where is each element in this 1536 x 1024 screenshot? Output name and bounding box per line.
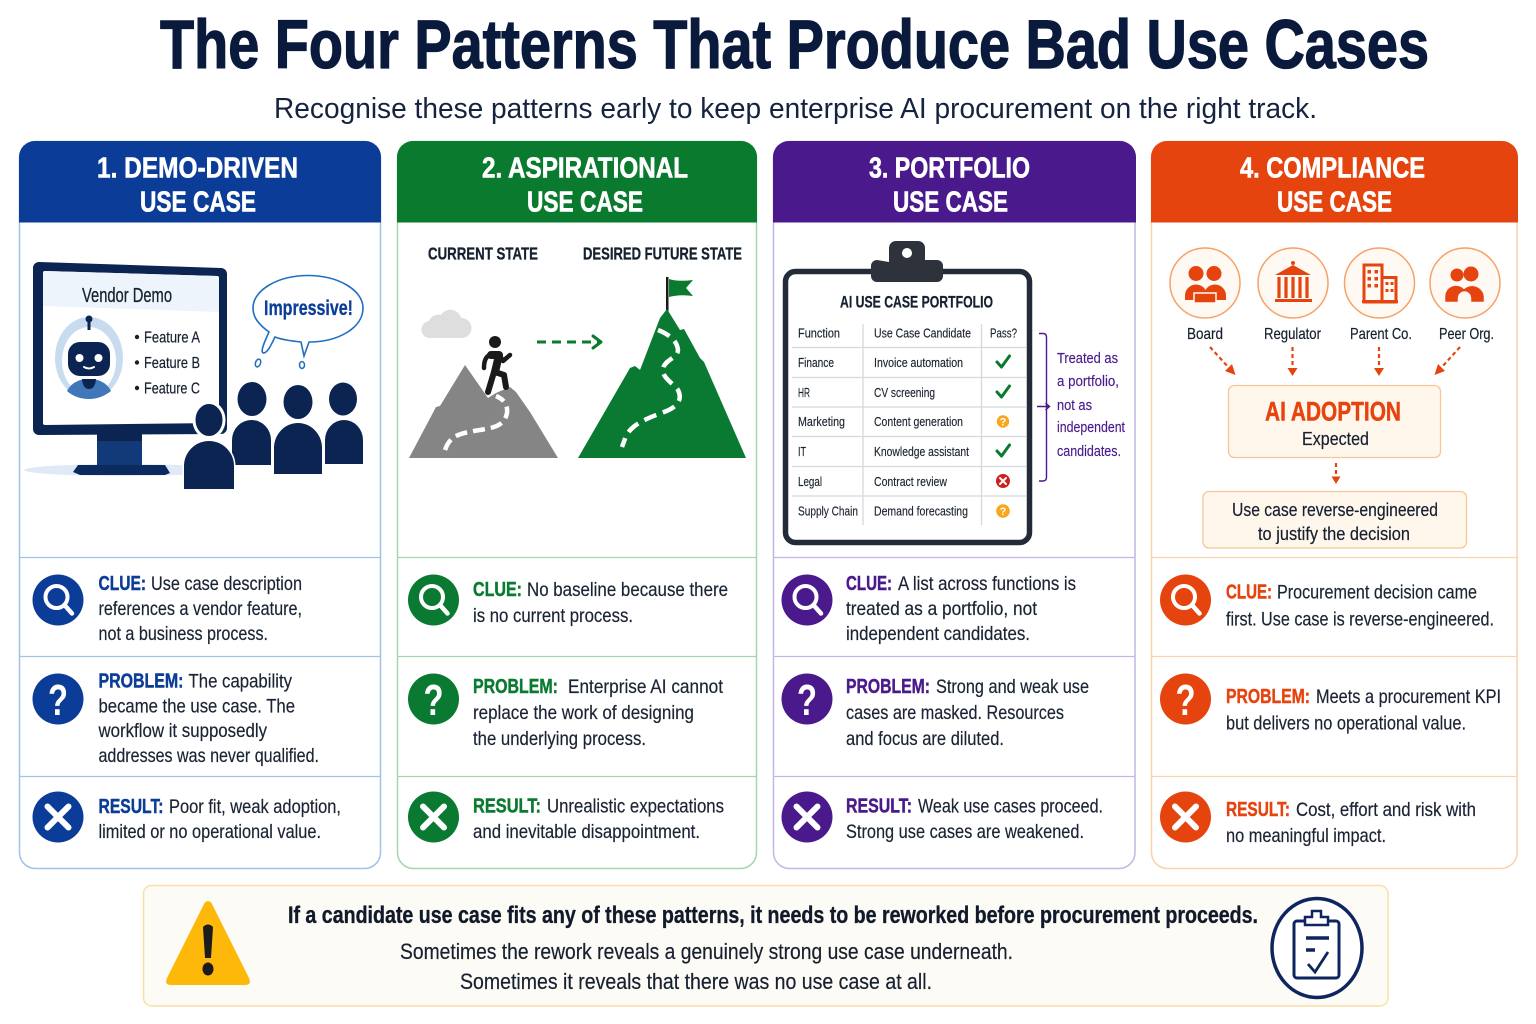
callout: impressive speech bubble: Impressive! <box>264 297 353 320</box>
icon: result cross <box>408 792 459 842</box>
callout: treated as a portfolio: a portfolio, <box>1057 373 1119 390</box>
text: problem: Strong and weak use <box>936 676 1089 698</box>
audience silhouettes <box>184 382 363 489</box>
icon: result cross <box>32 792 84 842</box>
icon: problem question mark: ? <box>797 676 817 725</box>
panel header: aspirational <box>397 141 757 222</box>
icon: peer organisation <box>1430 248 1500 318</box>
illustration: clipboard portfolio table: Supply Chain <box>798 504 858 518</box>
subtitle: Recognise these patterns early to keep enterprise AI procurement on the right track. <box>274 93 1317 125</box>
text: clue: CLUE: <box>98 573 146 595</box>
icon: walking person <box>484 336 510 392</box>
illustration: clipboard portfolio table: Finance <box>798 356 834 370</box>
panel: compliance use case <box>1151 141 1518 868</box>
text: result: limited or no operational value. <box>98 821 321 843</box>
text: problem: PROBLEM: <box>98 670 184 692</box>
callout: treated as a portfolio: Treated as <box>1057 350 1118 367</box>
panel header: compliance: 4. COMPLIANCE <box>1240 152 1425 184</box>
text: problem: PROBLEM: <box>1226 686 1310 708</box>
illustration: vendor demo monitor and audience: Feature C <box>144 380 200 398</box>
text: clue: is no current process. <box>473 605 633 627</box>
callout: impressive speech bubble <box>253 276 363 368</box>
stakeholder labels: Parent Co. <box>1350 326 1412 343</box>
text: supporting lines <box>400 939 1013 994</box>
text: problem <box>1226 686 1501 734</box>
text: main warning: If a candidate use case fits any of these patterns, it needs to be reworked before procurement proceeds. <box>288 902 1258 929</box>
text: result: Strong use cases are weakened. <box>846 821 1084 843</box>
icon: problem question mark: ? <box>424 676 444 725</box>
text: problem <box>846 676 1089 750</box>
icon: problem question mark <box>1160 674 1211 725</box>
stakeholder labels: Board <box>1187 326 1223 343</box>
panel: aspirational use case <box>397 141 757 868</box>
text: result: RESULT: <box>846 796 912 818</box>
text: clue <box>846 573 1076 645</box>
text: problem <box>473 676 724 750</box>
arrow: dashed current to future <box>537 336 601 348</box>
text: problem: workflow it supposedly <box>98 720 267 742</box>
icon: result cross <box>782 792 832 842</box>
illustration: clipboard portfolio table: Use Case Candidate <box>874 326 971 340</box>
text: result <box>473 796 724 843</box>
text: result: Unrealistic expectations <box>547 796 724 818</box>
icon: checklist clipboard <box>1272 898 1362 998</box>
text: clue: not a business process. <box>98 623 268 645</box>
text: clue: No baseline because there <box>527 579 728 601</box>
AI adoption box <box>1228 386 1440 458</box>
text: problem: but delivers no operational value. <box>1226 712 1466 734</box>
text: clue <box>473 579 728 627</box>
illustration: desired future state <box>578 244 746 458</box>
panel header: aspirational: 2. ASPIRATIONAL <box>482 152 688 184</box>
illustration: clipboard portfolio table: Marketing <box>798 415 845 429</box>
illustration: clipboard portfolio table: HR <box>798 386 810 400</box>
panel: portfolio use case <box>773 141 1136 868</box>
text: clue: A list across functions is <box>898 573 1076 595</box>
illustration: vendor demo monitor and audience <box>24 262 363 489</box>
stakeholder labels <box>1187 326 1494 343</box>
illustration: clipboard portfolio table: Contract review <box>874 475 948 489</box>
arrow: adoption to reverse-engineered <box>1332 463 1340 484</box>
text: clue: Procurement decision came <box>1277 582 1477 604</box>
callout: rework before procurement <box>144 886 1388 1006</box>
illustration: clipboard portfolio table: Demand forecasting <box>874 504 968 518</box>
stakeholder labels: Peer Org. <box>1439 326 1494 343</box>
text: result: Weak use cases proceed. <box>918 796 1103 818</box>
illustration: current state <box>409 244 601 458</box>
text: result <box>846 796 1103 843</box>
illustration: clipboard portfolio table: Invoice automation <box>874 356 963 370</box>
illustration: desired future state: DESIRED FUTURE STATE <box>583 244 742 264</box>
panel header: compliance: USE CASE <box>1277 186 1392 218</box>
text: clue: CLUE: <box>473 579 522 601</box>
icon: problem question mark: ? <box>48 676 68 725</box>
stakeholder labels: Regulator <box>1264 326 1322 343</box>
icon: problem question mark: ? <box>1176 676 1196 725</box>
arrows: stakeholders to AI adoption <box>1210 347 1460 376</box>
illustration: clipboard portfolio table: IT <box>798 445 806 459</box>
illustration: vendor demo monitor and audience: Feature A <box>144 330 200 346</box>
icon: clue magnifier <box>32 574 84 626</box>
text: result: RESULT: <box>98 796 164 818</box>
panel header: compliance <box>1151 141 1518 222</box>
text: clue: CLUE: <box>846 573 892 595</box>
text: problem: PROBLEM: <box>846 676 930 698</box>
text: clue <box>1226 582 1494 630</box>
panel: demo-driven use case <box>19 141 381 868</box>
text: result: and inevitable disappointment. <box>473 821 700 843</box>
text: clue: Use case description <box>151 573 302 595</box>
icon: problem question mark <box>32 674 84 725</box>
callout: treated as a portfolio: candidates. <box>1057 443 1121 460</box>
illustration: clipboard portfolio table: Content generation <box>874 415 963 429</box>
AI adoption box: Expected <box>1302 428 1369 449</box>
text: problem <box>98 670 319 767</box>
text: supporting lines: Sometimes the rework reveals a genuinely strong use case underneath. <box>400 939 1013 964</box>
icon: clue magnifier <box>782 574 832 626</box>
text: problem: Meets a procurement KPI <box>1316 686 1501 708</box>
text: clue <box>98 573 302 645</box>
icon: warning triangle <box>166 901 250 985</box>
panel header: portfolio: USE CASE <box>893 186 1008 218</box>
callout: treated as a portfolio: not as <box>1057 397 1092 414</box>
illustration: current state: CURRENT STATE <box>428 244 538 264</box>
text: problem: PROBLEM: <box>473 676 558 698</box>
panel header: aspirational: USE CASE <box>527 186 643 218</box>
illustration: clipboard portfolio table: Pass? <box>990 326 1017 340</box>
text: result: Cost, effort and risk with <box>1296 799 1476 821</box>
panel header: demo-driven: USE CASE <box>140 186 256 218</box>
pass status icons: ? <box>1000 416 1007 428</box>
icon: cloud <box>421 310 472 338</box>
text: problem: addresses was never qualified. <box>98 745 319 767</box>
icon: clue magnifier <box>1160 574 1211 626</box>
illustration: vendor demo monitor and audience: Vendor Demo <box>82 285 172 307</box>
illustration: clipboard portfolio table: Knowledge assistant <box>874 445 969 459</box>
icon: clue magnifier <box>408 574 459 626</box>
panel header: portfolio <box>773 141 1136 222</box>
text: problem: cases are masked. Resources <box>846 702 1064 724</box>
text: clue: treated as a portfolio, not <box>846 598 1038 620</box>
text: clue: CLUE: <box>1226 582 1272 604</box>
text: problem: The capability <box>188 670 292 692</box>
text: problem: Enterprise AI cannot <box>568 676 724 698</box>
panel header: demo-driven <box>19 141 381 222</box>
text: result: RESULT: <box>473 796 541 818</box>
icon: problem question mark <box>408 674 459 725</box>
pass status icons: ? <box>1000 506 1007 518</box>
text: clue: independent candidates. <box>846 623 1030 645</box>
text: problem: became the use case. The <box>98 696 295 718</box>
illustration: clipboard portfolio table <box>786 241 1030 542</box>
illustration: clipboard portfolio table: AI USE CASE PORTFOLIO <box>840 294 993 312</box>
text: problem: replace the work of designing <box>473 702 694 724</box>
text: result <box>1226 799 1476 847</box>
illustration: clipboard portfolio table: CV screening <box>874 386 935 400</box>
text: supporting lines: Sometimes it reveals that there was no use case at all. <box>460 969 932 994</box>
icon: problem question mark <box>782 674 832 725</box>
callout: treated as a portfolio <box>1037 334 1126 481</box>
illustration: clipboard portfolio table: Legal <box>798 475 822 489</box>
icon: result cross <box>1160 792 1211 842</box>
reverse-engineered box: Use case reverse-engineered <box>1232 499 1438 520</box>
text: problem: the underlying process. <box>473 728 646 750</box>
illustration: vendor demo monitor and audience: Feature B <box>144 355 200 372</box>
illustration: clipboard portfolio table: Function <box>798 326 840 340</box>
pass status icons <box>996 356 1010 518</box>
text: result: Poor fit, weak adoption, <box>169 796 341 818</box>
text: problem: and focus are diluted. <box>846 728 1004 750</box>
panel header: portfolio: 3. PORTFOLIO <box>869 152 1030 184</box>
reverse-engineered box <box>1203 492 1466 548</box>
text: result: RESULT: <box>1226 799 1290 821</box>
icon: parent company <box>1344 248 1414 318</box>
AI adoption box: AI ADOPTION <box>1265 396 1401 426</box>
reverse-engineered box: to justify the decision <box>1258 523 1410 544</box>
icon: regulator <box>1258 248 1328 318</box>
text: result: no meaningful impact. <box>1226 825 1386 847</box>
text: result <box>98 796 341 843</box>
panel header: demo-driven: 1. DEMO-DRIVEN <box>97 152 298 184</box>
icon: board <box>1170 248 1240 318</box>
callout: treated as a portfolio: independent <box>1057 419 1126 436</box>
icon: robot avatar <box>55 316 123 399</box>
text: clue: references a vendor feature, <box>98 598 302 620</box>
